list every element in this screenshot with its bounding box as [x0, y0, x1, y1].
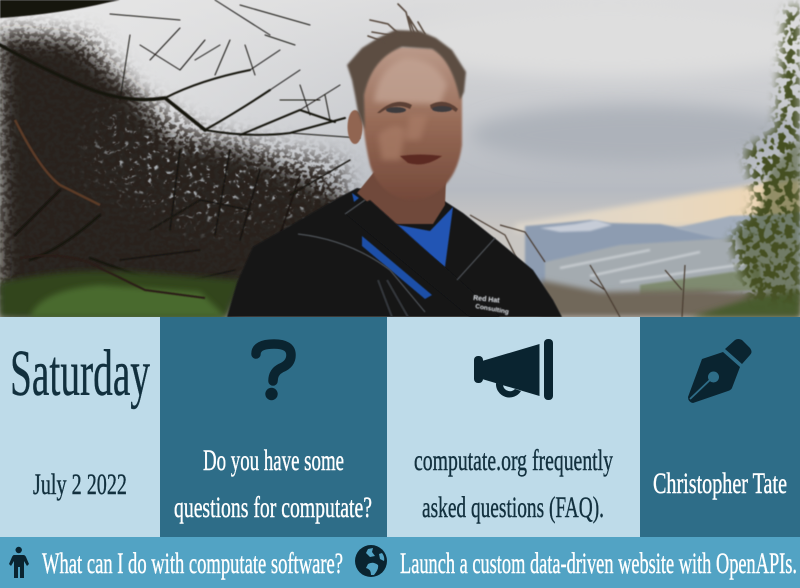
man: logo on jacket — [473, 295, 509, 316]
text: date: July 2 2022 — [33, 468, 127, 501]
man: logo on jacket: Red Hat — [473, 295, 500, 305]
bare shrubs behind the shoulder — [470, 215, 685, 317]
grass: green hillside — [0, 271, 240, 317]
icon: person — [9, 547, 29, 578]
icon: globe — [355, 545, 387, 577]
man: ear — [348, 110, 362, 144]
man: shoulder strap — [345, 200, 500, 317]
man: blue shirt collar strip — [352, 193, 432, 299]
icon: fountain pen nib — [688, 339, 752, 403]
text: question: What can I do with computate software? — [42, 547, 343, 580]
man: neck — [357, 172, 446, 224]
panel: FAQ — [387, 317, 640, 537]
man: hair — [347, 4, 466, 130]
man: face — [362, 47, 462, 200]
heading: Saturday: Saturday — [10, 337, 150, 410]
text: FAQ description: computate.org frequently — [414, 444, 613, 477]
tree: leafy tree on the right — [730, 5, 800, 300]
text: FAQ description: asked questions (FAQ). — [422, 491, 604, 524]
man: jacket zip trim — [298, 200, 495, 317]
man: mouth — [400, 154, 442, 164]
text: questions prompt — [174, 444, 372, 524]
text: questions prompt: questions for computate? — [174, 491, 372, 524]
bottom bar — [0, 537, 800, 588]
man: jacket — [227, 188, 562, 317]
trees: bare branches on the left — [0, 0, 360, 317]
text: questions prompt: Do you have some — [203, 444, 344, 477]
man: eyes and brows — [377, 102, 458, 113]
icon: question mark — [256, 344, 291, 400]
icon: megaphone — [474, 339, 553, 400]
man: blue shirt — [393, 207, 453, 267]
photo: portrait of a man on a mountain hillside — [0, 0, 800, 317]
panel: author — [640, 317, 800, 537]
text: FAQ description — [414, 444, 613, 524]
man: logo on jacket: Consulting — [475, 303, 509, 316]
panel: questions — [160, 317, 387, 537]
panel: date — [0, 317, 160, 537]
